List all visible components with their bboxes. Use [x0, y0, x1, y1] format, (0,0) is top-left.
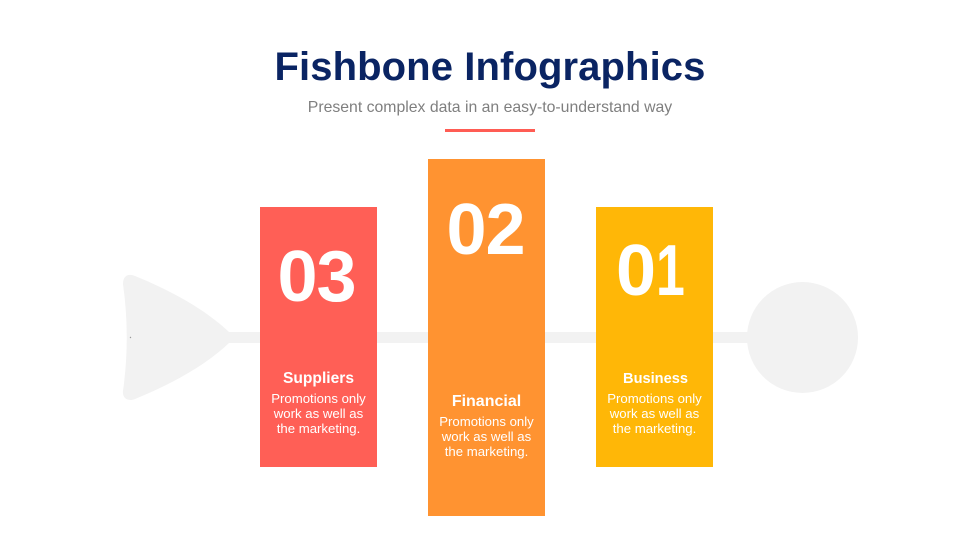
card 03: suppliers	[260, 207, 377, 467]
heading business: Business	[623, 371, 688, 387]
heading financial: Financial	[452, 393, 521, 410]
description financial	[439, 414, 534, 459]
subtitle: Present complex data in an easy-to-understand way	[308, 99, 672, 116]
description financial: work as well as	[442, 429, 531, 444]
description business: Promotions only	[607, 391, 702, 406]
fish spine	[225, 332, 755, 343]
title accent line	[445, 129, 535, 132]
card 02: financial	[428, 159, 545, 516]
description suppliers: work as well as	[274, 406, 363, 421]
number 01: 0	[616, 231, 656, 311]
title: Fishbone Infographics	[274, 45, 706, 89]
number 01	[616, 231, 685, 311]
description business: the marketing.	[613, 421, 696, 436]
number 01: 1	[656, 231, 685, 311]
description suppliers: the marketing.	[277, 421, 360, 436]
number 02: 02	[446, 190, 525, 270]
card 01: business	[596, 207, 713, 467]
heading suppliers: Suppliers	[283, 370, 354, 387]
fish tail	[123, 275, 229, 400]
description suppliers: Promotions only	[271, 391, 366, 406]
description suppliers	[271, 391, 366, 436]
fish head	[747, 282, 858, 393]
description financial: Promotions only	[439, 414, 534, 429]
description financial: the marketing.	[445, 444, 528, 459]
number 03: 03	[277, 237, 356, 317]
tail speck	[130, 337, 131, 338]
description business: work as well as	[610, 406, 699, 421]
description business	[607, 391, 702, 436]
